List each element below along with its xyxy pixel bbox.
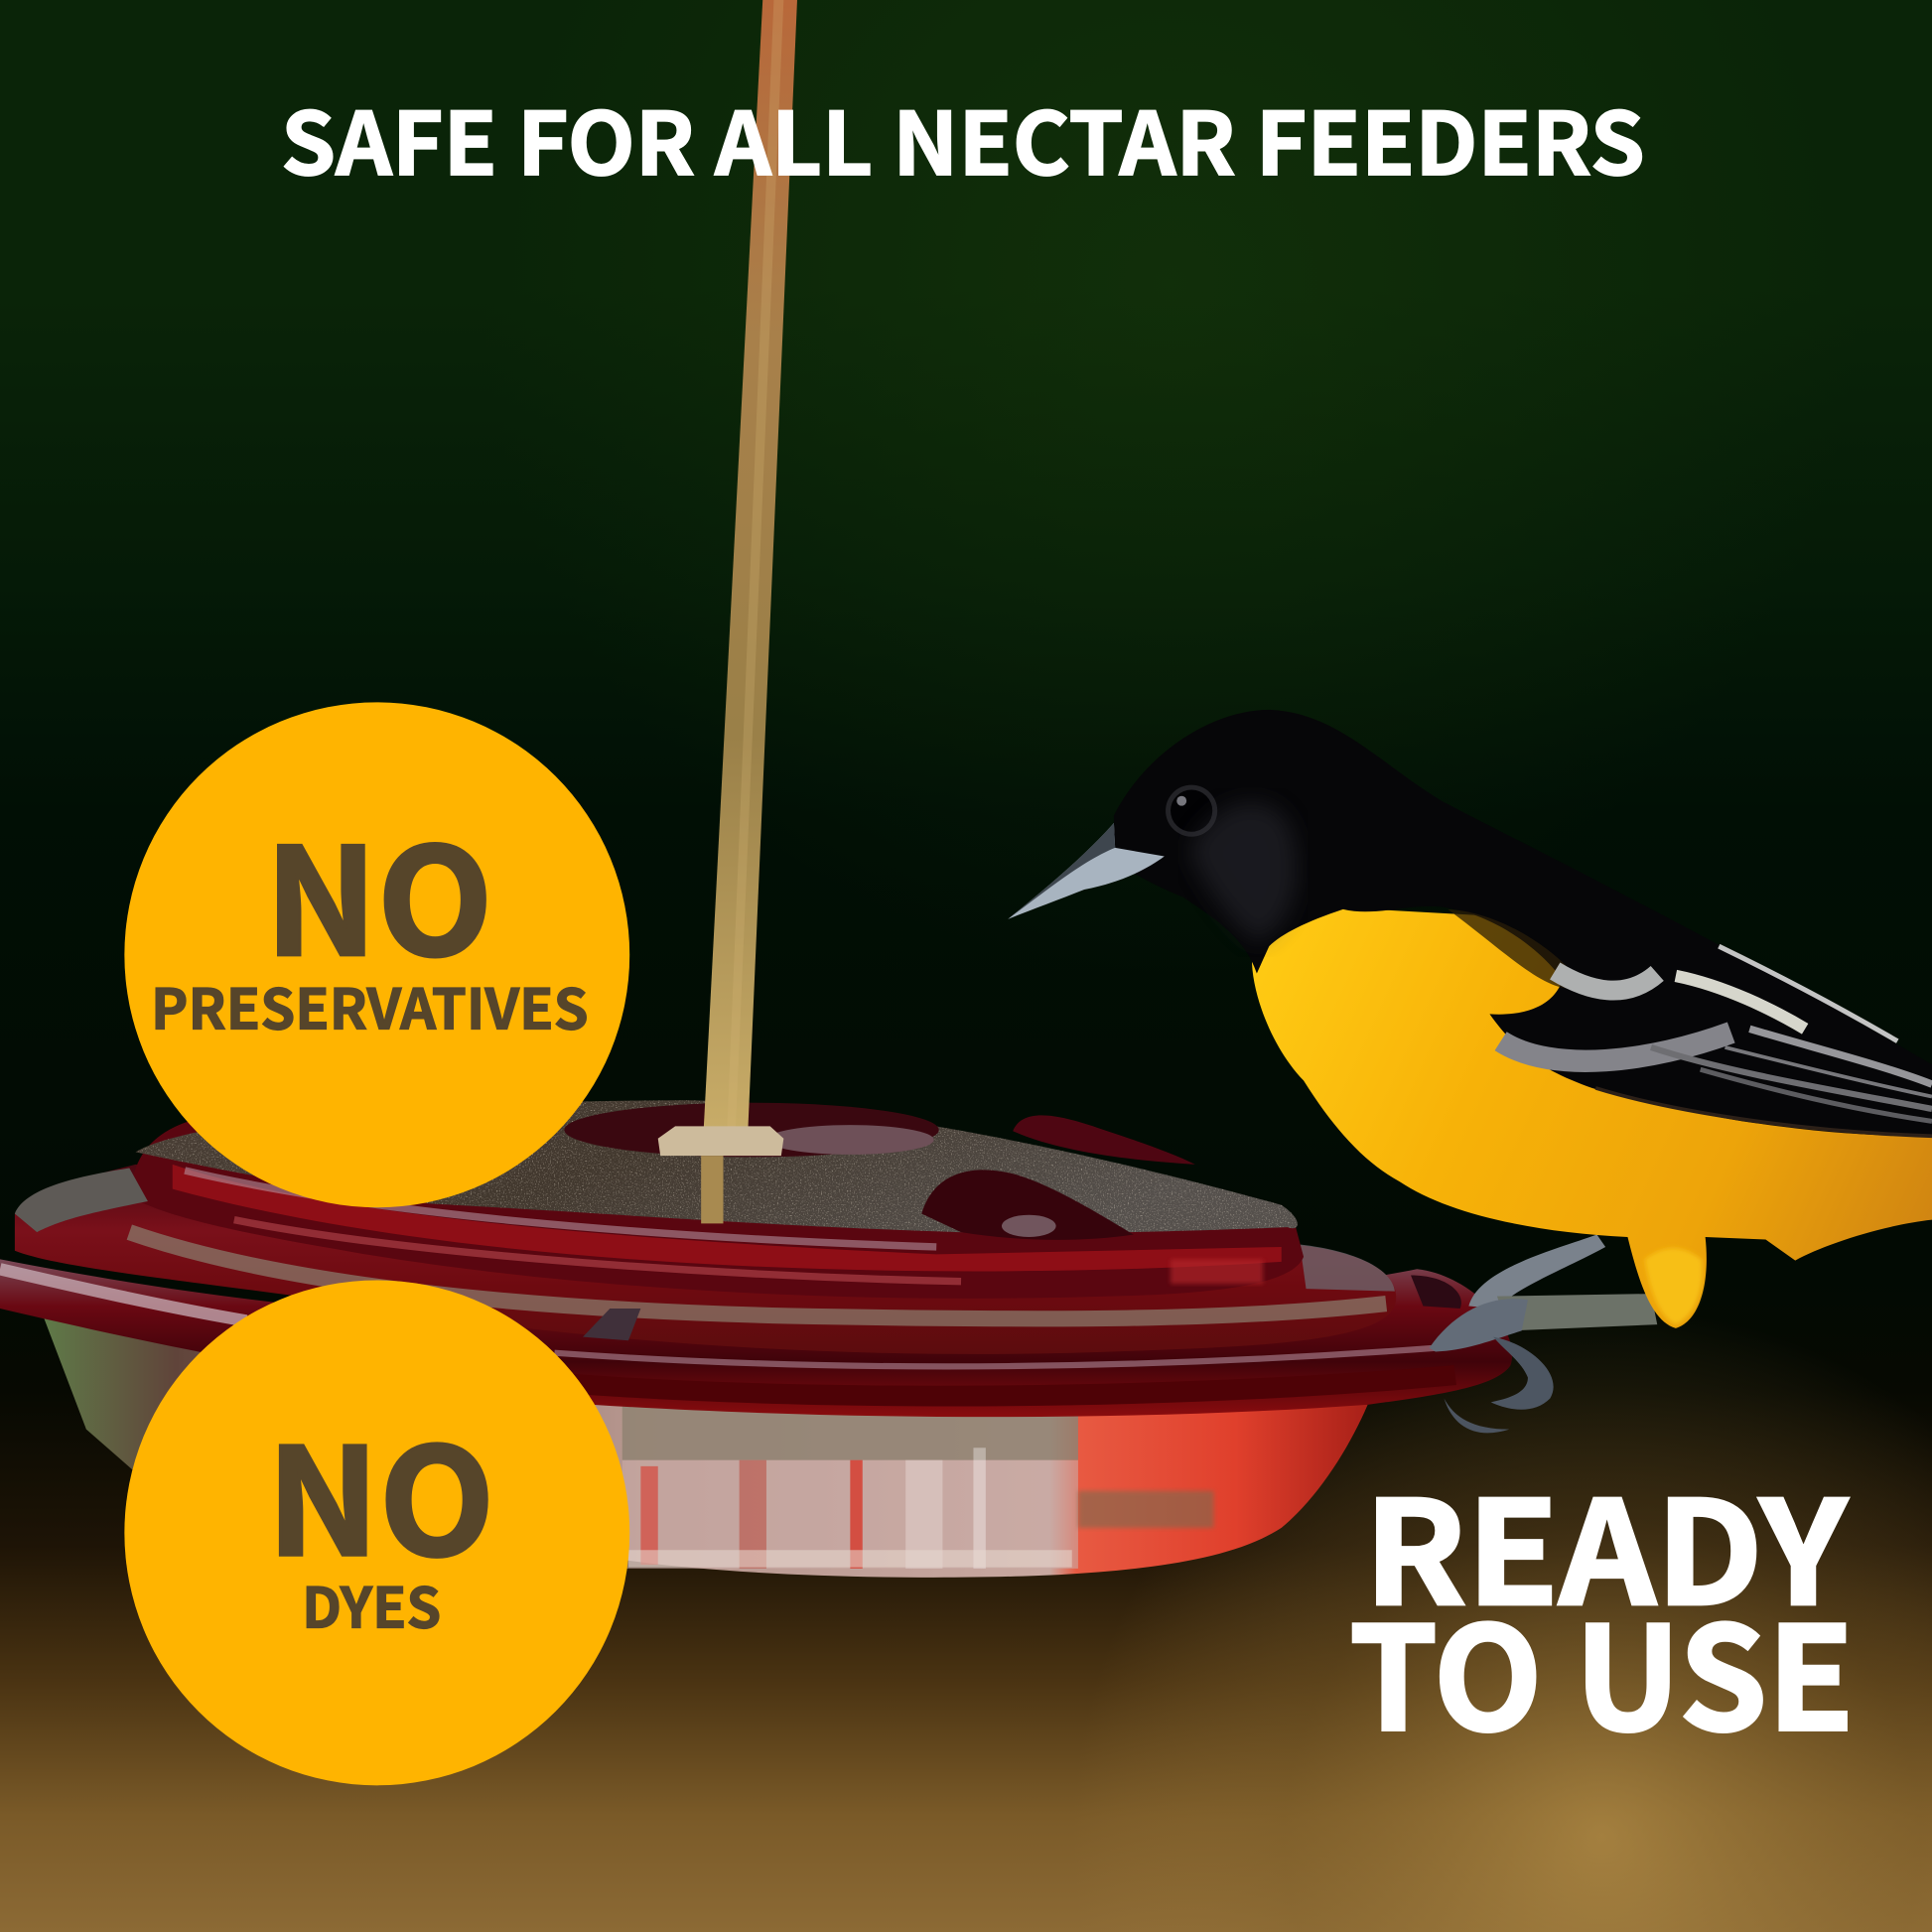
oriole wing feathers	[1501, 946, 1932, 1136]
feeder: red top dome	[129, 1115, 1304, 1299]
oriole perched on feeder	[1008, 710, 1932, 1433]
callout: ready to use: TO USE	[1349, 1565, 1855, 1771]
headline: SAFE FOR ALL NECTAR FEEDERS	[281, 75, 1645, 201]
oriole yellow body	[1252, 905, 1932, 1328]
badge: no dyes	[124, 1280, 629, 1785]
badge: no preservatives	[124, 702, 629, 1207]
feeder: textured grey top surface	[15, 1100, 1298, 1233]
oriole thigh highlight	[1645, 1248, 1703, 1324]
oriole cheek sheen	[1189, 802, 1297, 942]
feeder: red lower rim	[0, 1259, 1512, 1417]
badge: no dyes: NO	[267, 1383, 494, 1597]
badge: no dyes: DYES	[302, 1564, 441, 1644]
oriole shoulder markings	[1448, 909, 1584, 989]
feeder: hanging rod	[704, 0, 797, 1131]
feeder: red middle disc	[15, 1165, 1396, 1354]
callout: ready to use: READY	[1364, 1440, 1849, 1646]
feeder: glass nectar bowl	[43, 1315, 1368, 1578]
feeder: rod collar and reflection	[658, 1126, 783, 1223]
oriole black head and back	[1114, 710, 1932, 1136]
oriole legs and feet	[1430, 1235, 1657, 1433]
feeder: feeding port flaps	[921, 1115, 1195, 1240]
badge: no preservatives: PRESERVATIVES	[151, 965, 589, 1045]
callout: ready to use	[1349, 1440, 1855, 1771]
oriole eye	[1166, 785, 1217, 837]
oriole beak	[1008, 823, 1165, 919]
badge: no preservatives: NO	[265, 783, 492, 998]
